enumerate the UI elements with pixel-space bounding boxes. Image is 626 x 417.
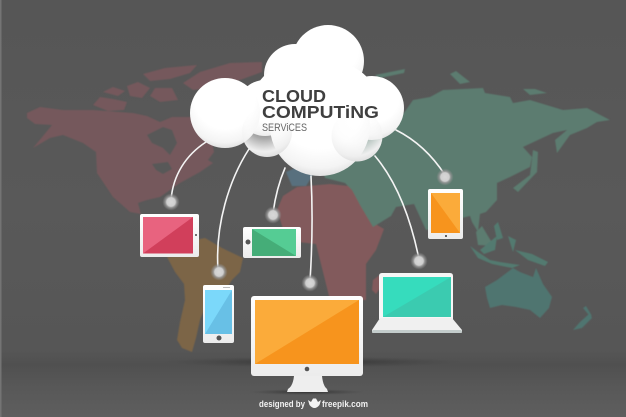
map: Arctic islands <box>375 69 547 246</box>
credit: designed by freepik: designed by <box>259 399 306 410</box>
map: North America <box>27 62 262 214</box>
device: orange tablet <box>428 189 463 239</box>
device: desktop monitor <box>251 296 363 392</box>
monitor body <box>251 296 363 376</box>
map: Australia <box>485 268 552 318</box>
device: laptop <box>372 273 462 333</box>
map: Europe <box>286 166 316 186</box>
floor shadows <box>161 356 465 395</box>
map: New Zealand <box>573 306 592 330</box>
title: cloud computing services: SERViCES <box>262 122 307 134</box>
icon: freepik crown <box>308 398 321 408</box>
connector lines <box>171 130 445 281</box>
map: Indonesia <box>470 222 548 268</box>
map: Asia <box>320 88 610 232</box>
map: Madagascar <box>372 274 383 294</box>
cloud <box>190 25 404 176</box>
map: Africa <box>277 184 384 300</box>
monitor stand <box>287 376 328 392</box>
device: red tablet <box>140 214 199 257</box>
credit: designed by freepik: freepik.com <box>322 399 368 410</box>
credit: designed by freepik <box>259 398 368 410</box>
title: cloud computing services: CLOUD <box>262 86 326 106</box>
connector nodes <box>162 168 454 292</box>
title: cloud computing services: COMPUTiNG <box>262 102 379 122</box>
device: blue smartphone <box>203 285 234 343</box>
monitor screen <box>255 300 359 364</box>
map: South America <box>167 238 243 352</box>
map: Japan <box>513 150 538 192</box>
map: dark lakes and bays <box>147 127 177 174</box>
title: cloud computing services <box>262 86 379 134</box>
device: green tablet <box>243 227 301 258</box>
world map <box>27 62 610 352</box>
